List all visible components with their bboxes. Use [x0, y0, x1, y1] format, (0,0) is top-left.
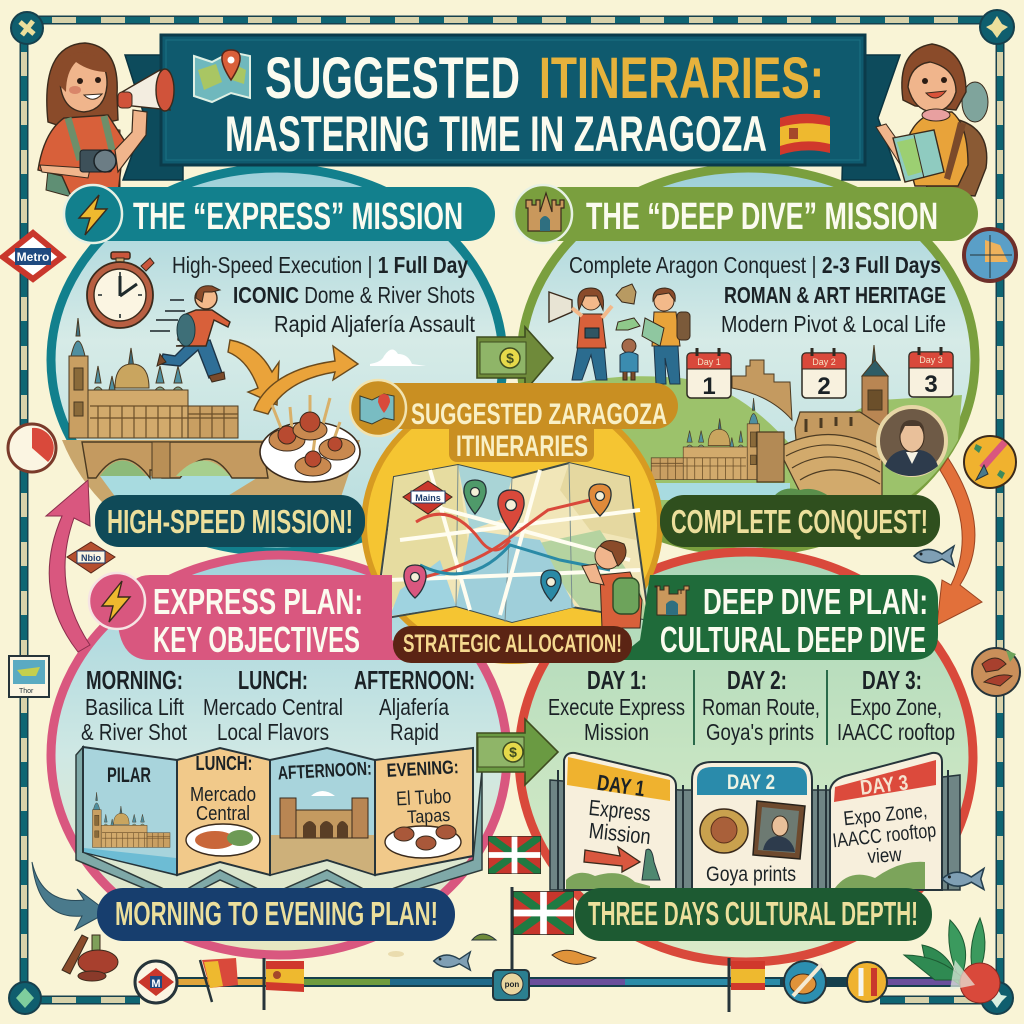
- calendar: day 1: Day 1: [697, 357, 721, 367]
- metro sign: [403, 481, 452, 514]
- megaphone woman: [549, 288, 612, 380]
- panel header: deep dive plan: [615, 575, 938, 660]
- text block: day 2: Goya's prints: [706, 719, 814, 745]
- floating map pieces: [616, 284, 640, 330]
- map panel: lunch: [177, 748, 270, 875]
- card: day 1: DAY 1: [596, 770, 647, 801]
- title banner: ITINERARIES:: [539, 46, 824, 111]
- text block: afternoon: [354, 665, 475, 745]
- icon: tools and ham: [62, 935, 118, 981]
- heading line 1: SUGGESTED: [265, 46, 520, 111]
- map panel: evening: Tapas: [407, 805, 451, 827]
- calendar: day 1: [687, 348, 731, 400]
- bushes: [770, 488, 830, 510]
- panel header: express plan: EXPRESS PLAN:: [153, 581, 363, 622]
- panel: central yellow hub circle: [364, 389, 660, 661]
- man with map: [642, 288, 690, 384]
- text block: morning: MORNING:: [86, 665, 183, 695]
- arrow: money arrow top: [477, 327, 553, 391]
- callout: three days cultural depth: [575, 888, 932, 941]
- panel header: central hub title: [350, 380, 678, 463]
- icon: tapas plate: [260, 395, 360, 482]
- icon: basque flag on pole: [512, 887, 574, 985]
- icon: basque flag small: [488, 836, 541, 874]
- card: day 3: DAY 3: [859, 771, 909, 800]
- card: day 2: DAY 2: [727, 771, 775, 794]
- text block: day 1: Execute Express: [548, 694, 685, 720]
- icon: food badge: [972, 648, 1020, 696]
- icon: running traveller: [150, 286, 230, 382]
- camera: [80, 150, 116, 172]
- text block: afternoon: AFTERNOON:: [354, 665, 475, 695]
- map panel: evening: El Tubo: [396, 786, 452, 810]
- text block: afternoon: Rapid: [390, 719, 439, 745]
- map panel: lunch: LUNCH:: [196, 753, 252, 775]
- icon: metro circle: [135, 961, 177, 1003]
- callout: strategic allocation: [393, 626, 632, 663]
- icon: metro circle: M: [151, 978, 161, 990]
- text block: day 2: DAY 2:: [727, 665, 787, 695]
- card: day 1: [564, 753, 676, 890]
- basilica skyline: [651, 398, 759, 480]
- icon: lightning bolt: [89, 573, 145, 629]
- text block: day 3: [837, 665, 955, 745]
- text block: lunch: Local Flavors: [217, 719, 329, 745]
- icon: Spanish flag: [780, 114, 830, 155]
- pins: [404, 480, 611, 601]
- card: day 2: Goya prints: [706, 863, 796, 886]
- text block: day 2: Roman Route,: [702, 694, 820, 720]
- icon: mini map card: [9, 656, 49, 697]
- map panel: lunch: Mercado: [190, 784, 256, 806]
- arrow: orange connector arrow: [937, 458, 982, 625]
- panel: deep dive mission circle: [521, 168, 975, 552]
- text block: day 1: Mission: [584, 719, 649, 745]
- text block: day 3: Expo Zone,: [850, 694, 942, 720]
- arrow: money arrow bottom: [477, 719, 558, 785]
- text block: day 2: [702, 665, 820, 745]
- card: day 3: view: [867, 844, 903, 868]
- text block: deep dive mission summary: Modern Pivot & Local Life: [721, 311, 946, 337]
- icon: art tools badge: [784, 961, 826, 1003]
- text block: express mission summary: High-Speed Execution | 1 Full Day: [172, 252, 468, 278]
- icon: clock badge: [8, 424, 56, 472]
- map panel: afternoon: [270, 748, 375, 875]
- stone bridge: [82, 442, 268, 478]
- icon: camera badge: pon: [505, 980, 519, 989]
- icon: Roman coin: [700, 809, 748, 853]
- central map: [375, 463, 649, 628]
- map panel: evening: EVENING:: [386, 757, 459, 782]
- icon: small metro sign: [67, 542, 115, 573]
- panel: express plan circle: [51, 555, 507, 955]
- icon: lightning bolt: [64, 185, 122, 243]
- panel header: deep dive plan: DEEP DIVE PLAN:: [703, 581, 928, 622]
- text block: day 1: DAY 1:: [587, 665, 647, 695]
- card: day 1: Mission: [588, 818, 652, 849]
- folded map: four-step day plan: [76, 747, 482, 902]
- calendar: day 3: 3: [924, 371, 938, 398]
- icon: cloud: [370, 349, 426, 366]
- text block: deep dive mission summary: Complete Aragon Conquest | 2-3 Full Days: [569, 252, 941, 278]
- icon: framed Goya portrait: [753, 801, 805, 859]
- panel: deep dive plan circle: [519, 552, 973, 962]
- callout: strategic allocation: STRATEGIC ALLOCATION!: [403, 630, 622, 658]
- text block: day 3: DAY 3:: [862, 665, 922, 695]
- icon: flag of Spain right: [729, 958, 765, 1012]
- panel header: express mission: THE “EXPRESS” MISSION: [133, 196, 463, 238]
- map panel: evening: [375, 748, 473, 875]
- illustration: woman with map and backpack: [876, 44, 988, 196]
- text block: deep dive mission summary: ROMAN & ART HERITAGE: [724, 282, 946, 308]
- text block: deep dive mission summary: [569, 252, 946, 337]
- text block: express mission summary: [172, 252, 475, 337]
- callout: morning to evening plan: [97, 888, 455, 941]
- calendar: day 3: Day 3: [919, 355, 943, 365]
- map panel: afternoon: AFTERNOON:: [277, 759, 372, 784]
- panel header: deep dive mission: [514, 185, 978, 243]
- card: day 1: Express: [588, 795, 652, 826]
- text block: morning: [81, 665, 187, 745]
- text block: afternoon: Aljafería: [379, 694, 449, 720]
- card: day 3: Expo Zone,: [842, 800, 928, 830]
- card: day 3: [830, 753, 942, 890]
- arrow: money arrow bottom: $: [509, 744, 517, 760]
- map panel: lunch: Central: [196, 803, 250, 825]
- illustration: deep dive scene: [540, 284, 962, 525]
- arrow: money arrow top: $: [506, 350, 514, 366]
- icon: fish upper right: [914, 546, 954, 566]
- megaphone: [118, 69, 174, 111]
- map panel: Pilar: PILAR: [107, 764, 151, 787]
- callout: morning to evening plan: MORNING TO EVENING PLAN!: [115, 895, 438, 932]
- card: day 2: [692, 762, 812, 890]
- card: day 3: IAACC rooftop: [832, 820, 937, 852]
- heading line 2: MASTERING TIME IN ZARAGOZA: [225, 106, 767, 162]
- icon: leaves and red ball: [904, 918, 1000, 1003]
- child: [620, 339, 638, 380]
- icon: mini map card: Thor: [19, 688, 34, 695]
- calendar: day 3: [909, 347, 953, 398]
- traveller trio: [549, 284, 690, 384]
- icon: metro sign left: Metro: [17, 250, 49, 264]
- icon: compass badge: [964, 229, 1016, 281]
- icon: castle: [514, 185, 572, 243]
- text block: lunch: LUNCH:: [238, 665, 308, 695]
- icon: Goya portrait medallion: [878, 407, 946, 476]
- panel header: express plan: KEY OBJECTIVES: [153, 619, 360, 660]
- icon: fish lower right: [942, 869, 984, 889]
- man reading map: [582, 540, 642, 628]
- text block: express mission summary: Rapid Aljafería Assault: [274, 311, 475, 337]
- title banner: [161, 35, 865, 165]
- icon: camera badge: [493, 970, 529, 1000]
- icon: stopwatch: [87, 252, 154, 328]
- panel header: central hub title: SUGGESTED ZARAGOZA: [411, 398, 667, 431]
- tower: [862, 345, 888, 446]
- icon: castle: [655, 586, 689, 615]
- arrow: pink return arrow: [46, 480, 90, 652]
- icon: paintbrush badge: [964, 436, 1016, 488]
- text block: lunch: Mercado Central: [203, 694, 343, 720]
- callout: high speed mission: HIGH-SPEED MISSION!: [107, 503, 353, 540]
- metro sign: Mains: [415, 493, 441, 503]
- calendar: day 2: 2: [817, 373, 831, 400]
- icon: fish bottom centre: [434, 952, 470, 970]
- map panel: Pilar: [83, 747, 177, 875]
- text block: morning: & River Shot: [81, 719, 187, 745]
- calendar: day 2: Day 2: [812, 357, 836, 367]
- icon: map badge: [350, 380, 406, 436]
- icon: flag of Spain: [264, 958, 304, 1010]
- callout: high speed mission: [95, 495, 365, 547]
- illustration: express mission scene: [62, 252, 426, 510]
- text block: day 3: IAACC rooftop: [837, 719, 955, 745]
- arrow: slate sweep arrow: [32, 862, 108, 930]
- text block: lunch: [203, 665, 343, 745]
- castle: [732, 360, 792, 420]
- arrow: orange route arrows: [228, 340, 358, 414]
- paper map: [893, 130, 944, 182]
- calendar: day 1: 1: [702, 373, 716, 400]
- panel header: express mission: [64, 185, 495, 243]
- panel header: central hub title: ITINERARIES: [456, 430, 588, 463]
- icon: folded map with pin: [194, 50, 250, 102]
- text block: day 1: [548, 665, 685, 745]
- panel: express mission circle: [51, 168, 503, 552]
- text block: morning: Basilica Lift: [85, 694, 185, 720]
- icon: flag orange red: [200, 958, 238, 1002]
- calendar: day 2: [802, 348, 846, 400]
- banner: title ribbon tails: [123, 55, 900, 180]
- text block: express mission summary: ICONIC Dome & River Shots: [233, 282, 475, 308]
- illustration: woman with megaphone: [38, 43, 174, 196]
- icon: small loaf: [388, 934, 596, 964]
- panel header: express plan: [89, 573, 420, 660]
- icon: metro sign left: [3, 233, 62, 279]
- icon: small metro sign: Nbio: [81, 553, 101, 563]
- open book: three day cards: [550, 753, 960, 890]
- icon: cutlery badge: [847, 962, 887, 1002]
- callout: complete conquest: [660, 495, 940, 547]
- roman theatre: [757, 412, 882, 502]
